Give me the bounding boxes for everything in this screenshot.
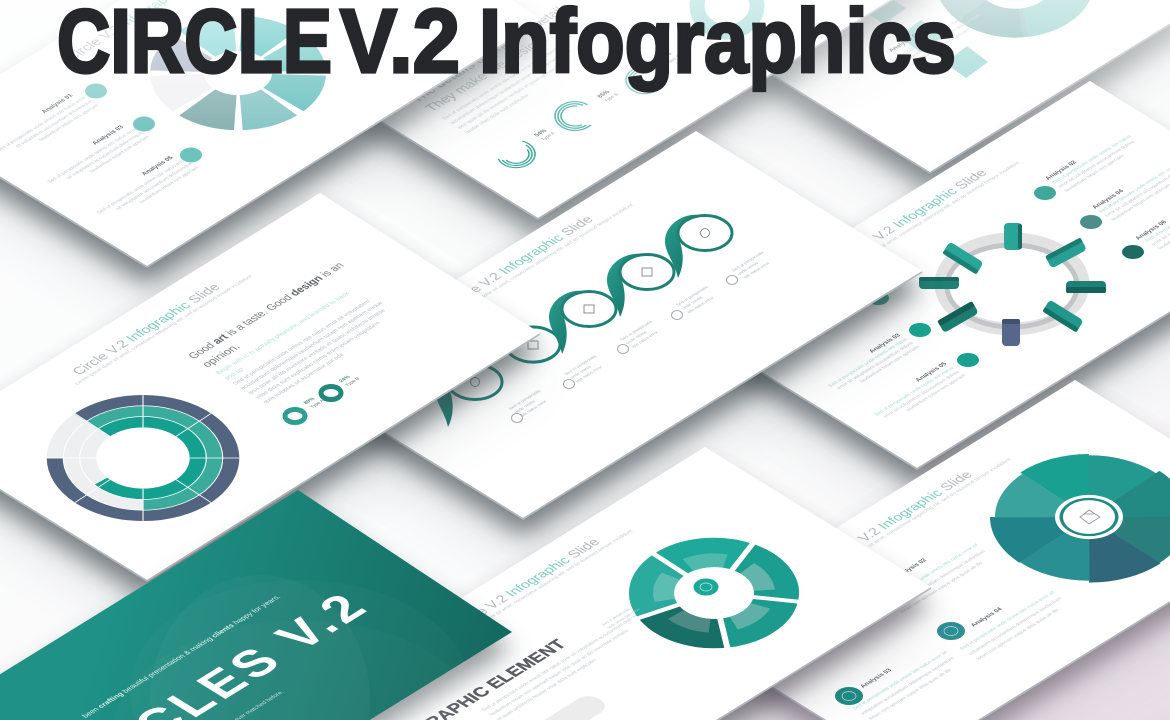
title: top left slide: Analysis 05	[140, 155, 175, 177]
title: top left slide: Sed ut perspiciatis unde omnis iste natus error	[46, 127, 139, 184]
icons: analysis dots	[85, 84, 202, 162]
icon: clipboard	[1080, 510, 1100, 524]
text: good art statement: accusantium doloremque laudantium totam rem aperiam eaque	[240, 301, 385, 391]
text: swirl captions: iste natus error	[574, 365, 604, 383]
text: small donut labels: 24%	[338, 375, 352, 384]
text: pie centre caption: Sed ut perspiciatis	[601, 608, 631, 626]
title: five segment pie slide: Lorem ipsum dolor sit amet, consectetur adipiscing elit, sed do eiusmod tempor incididunt	[457, 529, 635, 639]
title: donut slide: Circle V.2 Infographic Slide	[69, 281, 224, 377]
heading: the details: Sed ut perspiciatis unde omnis iste natus error sit voluptatem	[441, 47, 561, 121]
text: swirl captions: unde omnis	[569, 364, 593, 379]
text: analysis captions: voluptatem accusantium doloremque laudantium	[891, 549, 987, 609]
text: small donut labels: Type B	[344, 377, 361, 387]
panel: swirl slide	[297, 131, 922, 558]
text: analysis captions: voluptatem accusantium doloremque laudantium	[860, 656, 956, 716]
text: swirl captions: Sed ut perspiciatis	[619, 319, 654, 341]
heading: the details: 54%	[534, 128, 549, 138]
text: good art statement	[186, 261, 418, 405]
text: analysis captions	[766, 534, 1074, 720]
text: swirl captions: Sed ut perspiciatis	[730, 250, 766, 272]
title: ring slide: Analysis 02	[1044, 159, 1079, 181]
title: top left slide: laudantium totam rem aperiam	[138, 165, 201, 204]
text: analysis captions: Sed ut perspiciatis unde omnis iste natus error sit	[882, 543, 981, 604]
text: swirl captions: unde omnis	[680, 295, 704, 310]
heading: the details: 85%	[597, 89, 612, 99]
title: ring slide: Analysis 04	[1091, 188, 1126, 210]
text: top right slide captions: Sed ut perspiciatis unde omnis iste natus	[883, 16, 966, 67]
panel: ring slide	[691, 81, 1170, 508]
icons: analysis dots	[867, 186, 1144, 367]
icons: swirl captions	[512, 276, 738, 422]
title: ring slide: error sit voluptatem accusantium dolore	[1057, 140, 1137, 189]
text: analysis captions: Sed ut perspiciatis unde omnis iste natus error sit	[959, 590, 1057, 651]
heading: the details: ipsa quae ab illo inventore veritatis et quasi architecto	[456, 64, 562, 130]
chart: stepped pie	[996, 457, 1170, 577]
title: top left slide: Sed ut perspiciatis unde omnis iste natus error	[96, 158, 188, 215]
title: ring slide: Analysis 03	[868, 332, 903, 354]
panel: five segment pie slide	[306, 447, 931, 720]
panel: teal cover slide	[0, 490, 512, 720]
title: ring slide: laudantium totam rem aperiam	[858, 345, 921, 384]
title: ring slide: Sed ut perspiciatis unde omnis iste natus	[873, 366, 956, 417]
heading: the details	[407, 0, 682, 162]
text: good art statement: opinion.	[200, 342, 243, 369]
text: pie centre caption: unde omnis iste natus	[606, 608, 641, 629]
chart: ring with eight clips	[919, 223, 1106, 346]
title: ring slide: laudantium totam rem aperiam	[905, 373, 967, 412]
text: swirl captions: Sed ut perspiciatis	[674, 285, 710, 307]
heading: the details: Type C	[665, 54, 682, 64]
chart: swirl circles	[435, 215, 732, 427]
text: top right slide captions: Analysis 03	[887, 31, 922, 53]
text: swirl captions: iste natus error	[519, 399, 548, 418]
text: top right slide captions: laudantium totam rem aperiam	[909, 27, 972, 66]
title: top left slide: Analysis 03	[91, 124, 126, 146]
title: five segment pie slide: Circle V.2 Infographic Slide	[448, 536, 603, 632]
title: top left slide: Analysis 01	[40, 93, 75, 115]
chart: five segment pie	[626, 536, 805, 652]
title: ring slide	[726, 104, 1170, 425]
text: good art statement: Good art is a taste. Good design is an	[186, 261, 347, 361]
heading: graphic element: laudantium totam rem aperiam eaque ipsa quae ab illo inventore veritatis	[488, 629, 631, 717]
text: good art statement: pop up	[223, 367, 246, 381]
title: ring slide: error sit voluptatem accusantium dolore	[882, 370, 962, 419]
text: analysis captions: Sed ut perspiciatis unde omnis iste natus error sit	[851, 650, 950, 711]
chart: concentric arcs 54%	[492, 136, 540, 172]
title: ring slide: error sit voluptatem accusantium dolore	[836, 341, 915, 390]
text: swirl captions: unde omnis	[513, 399, 537, 414]
title: swirl slide: Lorem ipsum dolor sit amet, consectetur adipiscing elit, sed do eiusmod tempor incididunt	[452, 203, 635, 316]
heading: graphic element: et quasi architecto beatae vitae dicta sunt explicabo	[496, 658, 598, 720]
title: top left slide	[0, 0, 365, 223]
text: small donut labels	[303, 373, 361, 409]
chart: large segmented donut	[19, 376, 267, 540]
text: analysis captions: Analysis 03	[859, 667, 894, 689]
chart: tile ring	[152, 17, 324, 129]
title: ring slide: Sed ut perspiciatis unde omnis iste natus	[827, 337, 910, 388]
title: ring slide: laudantium totam rem aperiam	[1063, 154, 1126, 193]
icons: analysis dots	[835, 622, 965, 705]
text: analysis captions: totam rem aperiam eaque ipsa quae ab illo	[975, 608, 1061, 661]
text: swirl captions	[507, 250, 777, 418]
chart: top right segmented circle	[938, 0, 1092, 35]
text: good art statement: Sed ut perspiciatis unde omnis iste natus error sit voluptatem	[232, 299, 372, 386]
panel: top centre slide	[312, 0, 937, 258]
title: top left slide: laudantium totam rem aperiam	[38, 103, 100, 142]
chart: concentric arcs 85%	[547, 96, 603, 136]
heading: the details: beatae vitae dicta sunt explicabo	[464, 93, 531, 135]
panel: stepped pie slide	[676, 380, 1170, 720]
text: swirl captions: unde omnis	[736, 261, 760, 276]
text: top right slide captions	[874, 4, 988, 75]
heading: the details: 79%	[659, 51, 674, 61]
title: ring slide: Analysis 06	[1134, 219, 1169, 241]
title: ring slide: Sed ut perspiciatis unde omnis iste natus	[1051, 134, 1133, 185]
icon: centre dot	[694, 578, 718, 596]
title	[57, 0, 956, 92]
text: analysis captions: totam rem aperiam eaque ipsa quae ab illo	[899, 561, 985, 614]
text: top right slide captions: error sit voluptatem accusantium doloremque	[892, 13, 982, 69]
text: small donut labels: 89%	[303, 397, 317, 405]
heading: the details: Type B	[603, 92, 620, 103]
text: swirl captions: iste natus error	[686, 295, 716, 314]
title: donut slide: Lorem ipsum dolor sit amet, consectetur adipiscing elit, sed do eiusmod tempor incididunt	[74, 274, 254, 386]
text: analysis captions: voluptatem accusantium doloremque laudantium	[967, 596, 1064, 656]
text: swirl captions: unde omnis	[624, 330, 649, 345]
icon: thick ring arc	[697, 0, 757, 32]
text: swirl captions: Sed ut perspiciatis	[507, 388, 543, 410]
title: stepped pie slide: Lorem ipsum dolor sit amet, consectetur adipiscing elit, sed do eiusmod tempor incididunt	[828, 457, 1013, 572]
title: ring slide: Circle V.2 Infographic Slide	[836, 167, 990, 263]
text: swirl captions: iste natus error	[742, 261, 771, 279]
text: small donut labels: Type A	[309, 398, 326, 409]
text: analysis captions: totam rem aperiam eaque ipsa quae ab illo	[868, 668, 953, 720]
title: top left slide: laudantium totam rem aperiam	[88, 135, 151, 174]
title: top left slide: sit voluptatem accusantium doloremque	[14, 99, 94, 149]
title: ring slide: Analysis 05	[914, 361, 949, 383]
text: swirl captions: Sed ut perspiciatis	[563, 354, 598, 376]
heading: the details: Type A	[540, 131, 557, 141]
title: stepped pie slide: Circle V.2 Infographic Slide	[821, 469, 976, 565]
text: cover title: been crafting beautiful presentation & making clients happy for years.	[80, 593, 283, 719]
title: ring slide: Lorem ipsum dolor sit amet, consectetur adipiscing elit, sed do eiusmod tempor incididunt	[841, 160, 1022, 272]
heading: the details: They make the design.	[422, 34, 551, 114]
icon tiles	[862, 0, 988, 78]
title: top left slide: sit voluptatem accusantium doloremque	[65, 131, 145, 180]
panel: top right slide	[704, 0, 1170, 212]
white fade at the top of the image	[0, 0, 1170, 150]
text: analysis captions: Analysis 02	[894, 557, 929, 579]
chart: concentric arcs 79%	[618, 61, 672, 99]
heading: graphic element: Sed ut perspiciatis unde omnis iste natus error sit voluptatem accusantium doloremque	[481, 608, 649, 712]
text: good art statement: quia voluptas sit aspernatur aut odit	[262, 353, 346, 405]
text: good art statement: Begin with it, is actually pleasure, and learned to back	[215, 291, 352, 376]
panel: donut slide	[0, 193, 540, 620]
text: swirl captions: iste natus error	[630, 330, 660, 348]
title: top left slide: sit voluptatem accusantium doloremque	[114, 161, 195, 211]
title: swirl slide: Circle V.2 Infographic Slide	[442, 214, 597, 310]
heading: graphic element	[373, 594, 707, 720]
panel: top left slide	[0, 0, 542, 306]
text: good art statement: ipsa quae ab illo inventore veritatis et quasi architecto beatae	[247, 309, 387, 395]
chart: small donuts	[285, 386, 341, 422]
text: analysis captions: Analysis 04	[969, 606, 1004, 628]
text: good art statement: vitae dicta sunt explicabo nemo enim ipsam voluptatem	[255, 321, 382, 400]
heading: the details: The details are not the details.	[407, 0, 577, 104]
decorative circles on cover	[110, 575, 490, 720]
heading: the details: accusantium doloremque laudantium totam rem aperiam eaque	[449, 48, 573, 126]
